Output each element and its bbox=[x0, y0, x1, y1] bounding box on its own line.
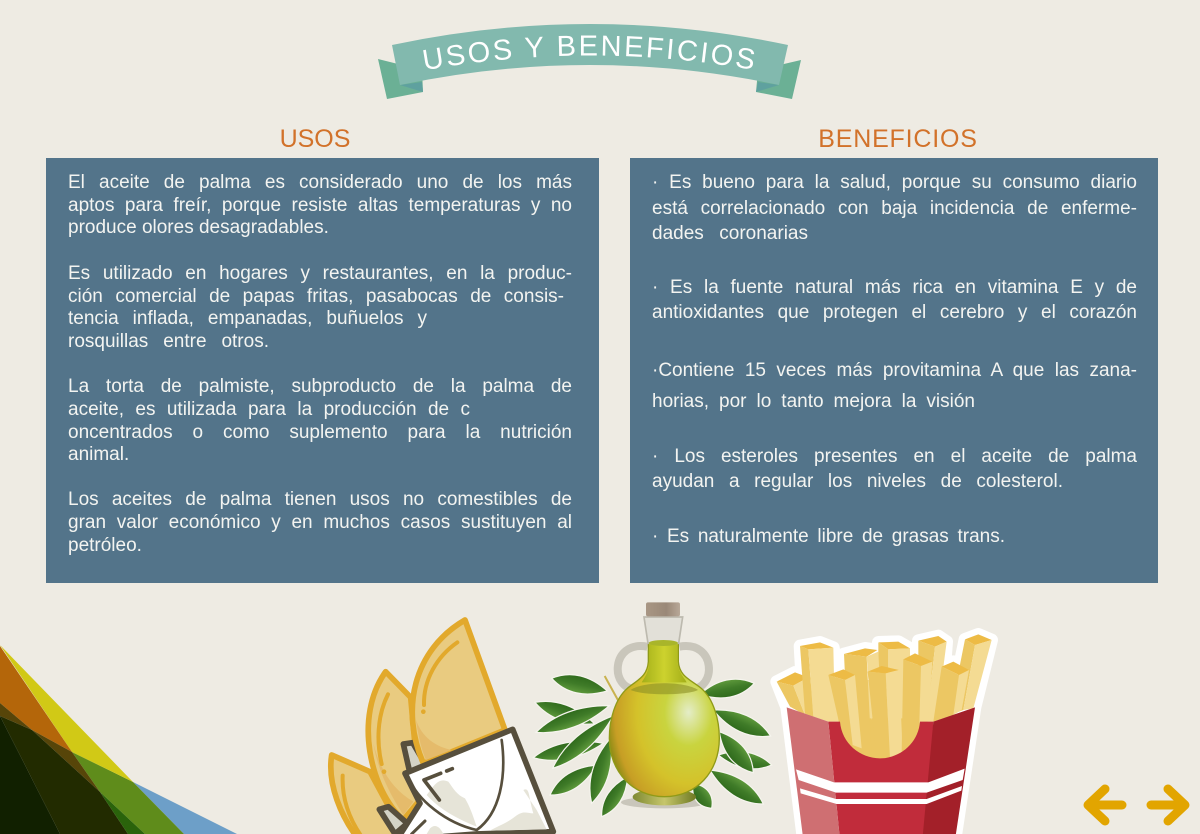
bottle handles bbox=[618, 646, 709, 689]
bottle neck liquid bbox=[642, 643, 687, 682]
paragraph 1 bbox=[68, 172, 572, 238]
benefit 3: horias, por lo tanto mejora la visión bbox=[652, 391, 975, 412]
paragraph 1: El aceite de palma es considerado uno de los más bbox=[68, 172, 572, 193]
paragraph 2: Es utilizado en hogares y restaurantes, en la produc- bbox=[68, 263, 572, 284]
icon: french fries bbox=[777, 634, 992, 834]
bottle body bbox=[609, 643, 719, 797]
icon: empanadas bbox=[331, 620, 553, 834]
benefit 2 bbox=[652, 277, 1137, 323]
box stripes bbox=[796, 769, 965, 804]
arrow: next bbox=[1151, 789, 1185, 821]
paragraph 4 bbox=[68, 489, 572, 556]
paragraph 4: petróleo. bbox=[68, 535, 142, 556]
title text: USOS Y BENEFICIOS bbox=[423, 36, 754, 69]
banner right tail bbox=[756, 60, 801, 99]
empanada back bbox=[331, 755, 407, 834]
benefit 1: está correlacionado con baja incidencia de enferme- bbox=[652, 198, 1137, 219]
banner left tail bbox=[378, 59, 423, 99]
benefit 2: · Es la fuente natural más rica en vitamina E y de bbox=[652, 277, 1137, 298]
bottle glass neck bbox=[644, 617, 683, 643]
paragraph 3: oncentrados o como suplemento para la nutrición bbox=[68, 422, 572, 443]
paragraph 2 bbox=[68, 263, 572, 352]
arrow: previous bbox=[1088, 789, 1122, 821]
panel: usos bbox=[46, 158, 599, 583]
fries white outline bbox=[777, 634, 992, 834]
paper back bbox=[379, 743, 427, 834]
oil surface bbox=[649, 640, 678, 646]
benefit 3 bbox=[652, 360, 1137, 412]
benefit 4 bbox=[652, 446, 1137, 492]
benefit 1: dades coronarias bbox=[652, 223, 808, 244]
benefit 2: antioxidantes que protegen el cerebro y el corazón bbox=[652, 302, 1137, 323]
paragraph 3: animal. bbox=[68, 444, 129, 465]
paragraph 2: tencia inflada, empanadas, buñuelos y bbox=[68, 308, 427, 329]
corner triangles bbox=[0, 645, 237, 834]
empanada front bbox=[412, 620, 505, 763]
benefit 4: ayudan a regular los niveles de colesterol. bbox=[652, 471, 1063, 492]
olive leaves bbox=[532, 670, 774, 821]
bottle base bbox=[633, 789, 696, 805]
empanada middle bbox=[368, 672, 420, 820]
benefit 5: · Es naturalmente libre de grasas trans. bbox=[652, 526, 1005, 547]
fries box bbox=[787, 707, 975, 834]
heading: beneficios: BENEFICIOS bbox=[818, 125, 978, 153]
paragraph 2: ción comercial de papas fritas, pasabocas de consis- bbox=[68, 286, 564, 307]
banner ribbon bbox=[392, 24, 788, 85]
paragraph 1: aptos para freír, porque resiste altas temperaturas y no bbox=[68, 195, 572, 216]
paragraph 4: Los aceites de palma tienen usos no comestibles de bbox=[68, 489, 572, 510]
bottle shoulder shade bbox=[631, 683, 698, 694]
cork bbox=[646, 602, 680, 616]
fries sticks bbox=[777, 634, 992, 759]
paragraph 3 bbox=[68, 376, 572, 465]
paper wrapper bbox=[397, 729, 553, 834]
heading: usos: USOS bbox=[280, 125, 350, 153]
benefit 1 bbox=[652, 172, 1137, 244]
paragraph 4: gran valor económico y en muchos casos sustituyen al bbox=[68, 512, 572, 533]
benefit 3: ·Contiene 15 veces más provitamina A que las zana- bbox=[652, 360, 1137, 381]
panel: beneficios bbox=[630, 158, 1158, 583]
icon: oil bottle with leaves bbox=[532, 602, 774, 821]
benefit 4: · Los esteroles presentes en el aceite de palma bbox=[652, 446, 1137, 467]
paragraph 2: rosquillas entre otros. bbox=[68, 331, 269, 352]
benefit 1: · Es bueno para la salud, porque su consumo diario bbox=[652, 172, 1137, 193]
title banner bbox=[378, 24, 801, 99]
paragraph 1: produce olores desagradables. bbox=[68, 217, 329, 238]
paragraph 3: aceite, es utilizada para la producción de c bbox=[68, 399, 470, 420]
paragraph 3: La torta de palmiste, subproducto de la palma de bbox=[68, 376, 572, 397]
